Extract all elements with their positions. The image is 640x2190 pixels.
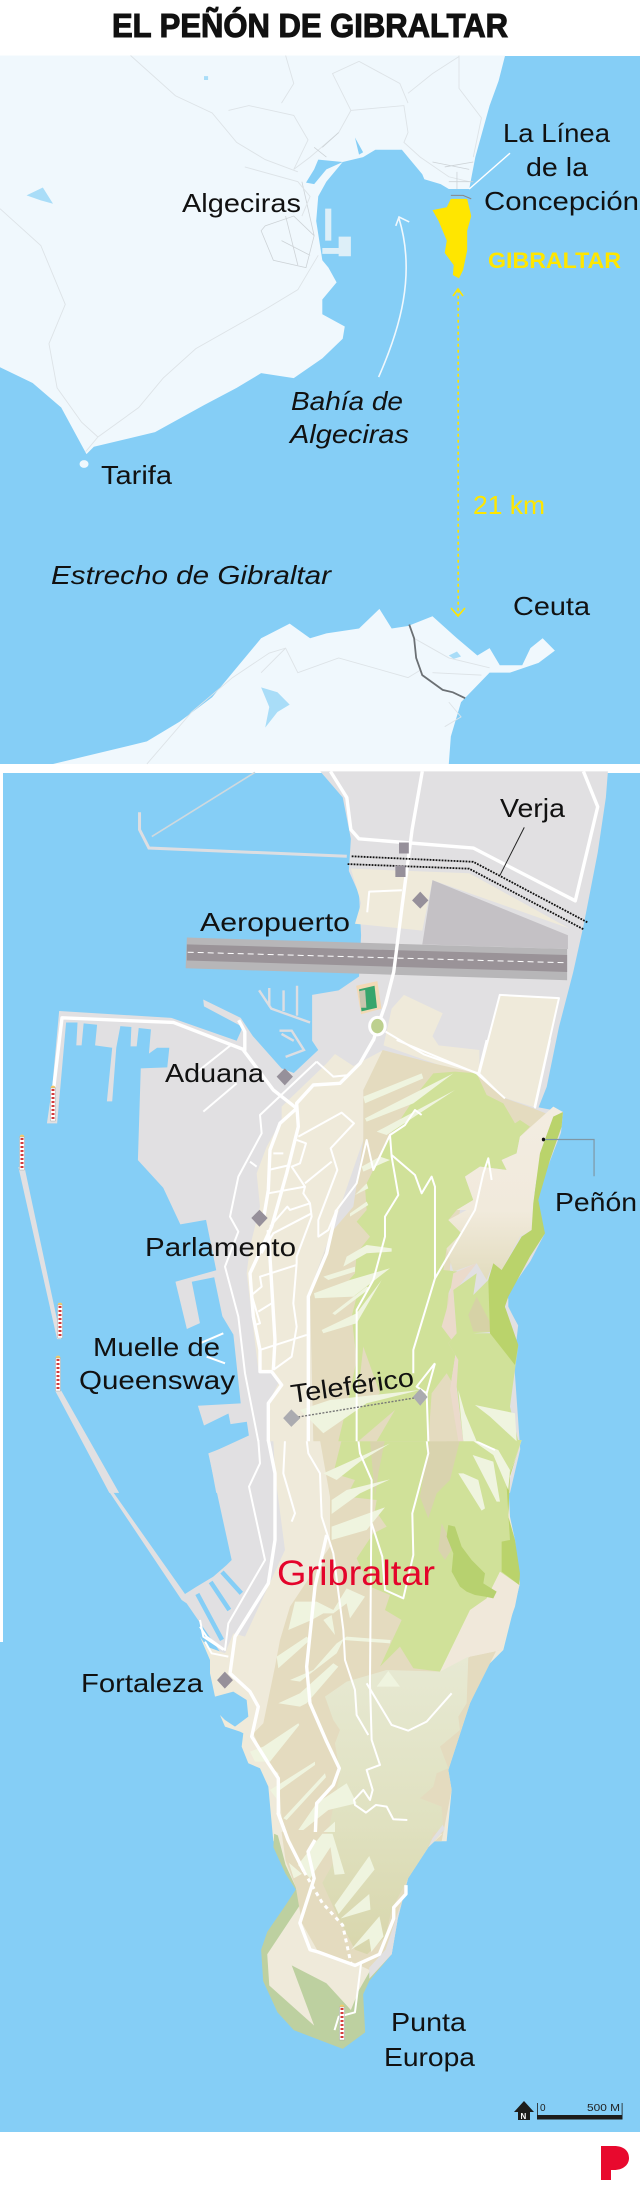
tan patch [468,1297,495,1332]
lighthouse north arm [50,1086,56,1121]
label: Aeropuerto: Aeropuerto [200,907,350,937]
lighthouse south mole three [56,1356,60,1391]
leader dot [542,1138,545,1141]
border of Ceuta [409,625,465,698]
roads: Africa [147,638,490,764]
footpath dotted [304,1872,351,1963]
arrow heads: 21 km distance [451,289,465,616]
roads: Spain [0,55,481,452]
cable car stations [283,1389,428,1427]
frontier line [451,195,471,199]
beige land by the airport [351,869,569,1107]
label: La Línea de la Concepción: de la [526,152,589,182]
northern peninsula: airport and port [18,771,608,1493]
icon: north arrow: N [520,2112,526,2121]
label: Bahía de Algeciras: Algeciras [288,419,409,449]
landmark: Parlamento marker [251,1210,268,1227]
grey urban land and port [47,771,608,1493]
light slope stripes [300,1073,517,1441]
green central slopes [338,1072,530,1441]
east green [448,1273,518,1441]
tan wedges in the green [370,1440,460,1560]
dark green east strip [502,1440,522,1585]
scale bar and north arrow [514,2101,622,2121]
roundabout [370,1017,385,1035]
runway [186,938,567,980]
pale Rock top [447,1107,563,1280]
label: Punta Europa [384,2007,476,2072]
lighthouses [20,1086,344,2040]
arrow: 21 km distance [457,290,459,616]
panel: regional map of the Strait [0,55,640,764]
valley shading [322,1832,433,1954]
landmark: Aduana marker [277,1068,293,1085]
leader: La Línea [469,153,510,189]
label: Bahía de Algeciras [288,386,409,449]
airport apron [422,880,568,949]
inland lakes [27,76,461,728]
label: Muelle de Queensway: Queensway [79,1365,235,1395]
label: Tarifa: Tarifa [101,460,173,490]
southern mole grey and port basins [108,1440,333,1657]
land: Ceuta and northern Morocco [53,609,555,764]
lighthouse south mole one [20,1135,24,1170]
grey coast patch [505,1298,517,1337]
label: GIBRALTAR: GIBRALTAR [488,248,621,273]
label: La Línea de la Concepción: La Línea [503,118,611,148]
label: Muelle de Queensway: Muelle de [93,1332,220,1362]
label: Parlamento: Parlamento [145,1232,296,1262]
label: La Línea de la Concepción [484,118,639,216]
logo: red P [601,2146,629,2180]
label: Fortaleza: Fortaleza [81,1668,204,1698]
arrow: bay of Algeciras [379,217,409,377]
label: 21 km: 21 km [473,490,545,520]
lighthouse south mole two [58,1303,62,1338]
central peninsula: northern Rock and town [200,1040,563,1441]
beige body [267,1834,443,2026]
roads upper [200,1040,550,1441]
label: Estrecho de Gibraltar: Estrecho de Gibraltar [51,560,333,590]
stadium [356,981,381,1014]
label: Bahía de Algeciras: Bahía de [291,386,403,416]
northern mole [140,812,347,856]
label: Ceuta: Ceuta [513,591,591,621]
panel: detailed map of Gibraltar [0,771,640,2132]
frontier posts [395,843,409,877]
overlays: markers, fence and leaders [251,827,594,1427]
beige body [200,1440,522,1841]
label: Teleférico: Teleférico [289,1362,416,1409]
scale bar [537,2103,622,2120]
islet: Tarifa [80,460,89,468]
label: Punta Europa: Europa [384,2042,476,2072]
southern moles [18,1167,119,1493]
light slope stripes [289,1834,384,1952]
title: EL PEÑÓN DE GIBRALTAR [112,7,508,45]
label: Aduana: Aduana [165,1058,265,1088]
leader: Peñón [543,1139,594,1176]
landmark: Fortaleza marker [217,1672,233,1689]
pale valley [325,1657,468,1841]
scale labels: 0 [540,2103,546,2114]
roads north [54,771,598,1107]
label: Verja: Verja [500,793,566,823]
port of Algeciras [322,209,351,256]
fence: Verja [348,856,588,929]
tan slopes [282,1832,443,1970]
green slopes [333,1440,522,1672]
scale labels [540,2103,620,2114]
water inlets near Algeciras [306,137,424,184]
light slope stripes [250,1440,510,1841]
lighthouse Punta Europa [340,2005,344,2040]
sage coast [261,1834,392,2049]
dark green patch [447,1525,497,1598]
town beige [247,1050,383,1441]
landmark: airport marker [412,892,428,909]
leader: Verja [500,827,524,876]
label: Punta Europa: Punta [391,2007,467,2037]
dark green east cliff [488,1112,563,1365]
central peninsula: main Rock slopes [200,1440,522,1841]
land: southern Spain [0,55,505,454]
cable car line [291,1397,420,1418]
pale eastern shore [442,1572,519,1672]
southern tip of the peninsula [217,1672,445,2049]
pink strip [442,1263,477,1441]
harbour piers [259,986,310,1057]
roads south [278,1813,406,2030]
label: Algeciras: Algeciras [182,188,301,218]
Gibraltar silhouette in yellow [432,199,471,278]
grey coast patches [369,1825,445,1979]
roads lower [200,1440,495,1841]
label: Muelle de Queensway [79,1332,235,1395]
tan slopes [253,1440,507,1841]
tan wedges [357,1347,458,1441]
scale labels: 500 M [587,2103,620,2114]
label: Peñón: Peñón [555,1187,637,1217]
label: La Línea de la Concepción: Concepción [484,186,639,216]
label: Gribraltar: Gribraltar [277,1554,435,1593]
outer breakwater [152,772,255,837]
tan slopes [310,1050,550,1441]
